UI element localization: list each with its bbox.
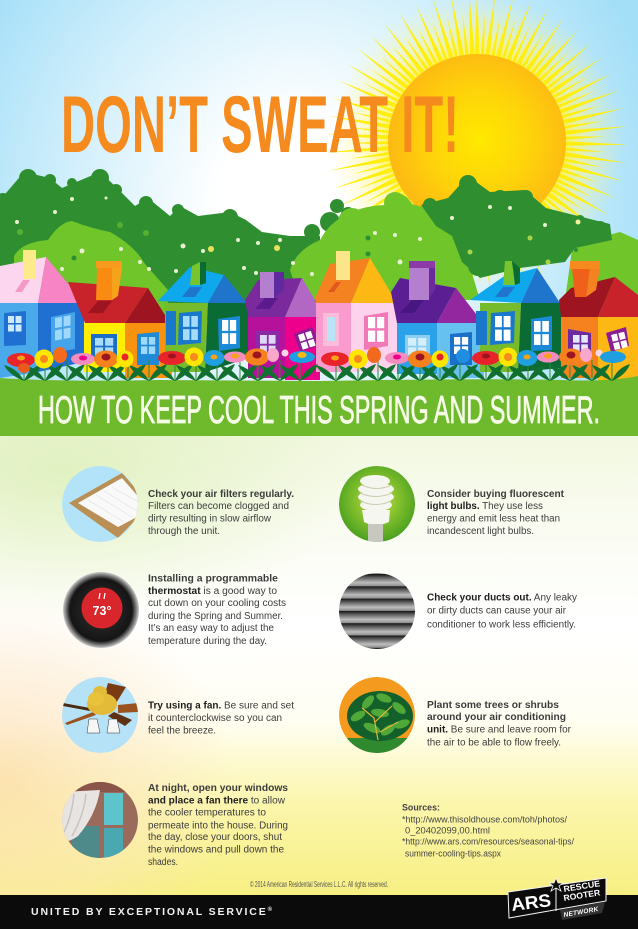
logo: ARS Rescue Rooter Network: RESCUE	[563, 878, 601, 894]
footer tagline: ®	[268, 906, 273, 913]
text: windows	[148, 783, 288, 868]
text: thermostat	[148, 574, 286, 647]
flowers row	[7, 347, 626, 373]
sources: 0_20402099,00.html	[405, 826, 490, 836]
text: air filters	[148, 489, 294, 537]
text: fan	[148, 700, 294, 736]
sources: *http://www.ars.com/resources/seasonal-tips/	[402, 836, 574, 846]
text: windows: permeate into the house. During	[148, 820, 288, 832]
icon: open window	[62, 782, 138, 860]
text: thermostat: temperature during the day.	[148, 636, 267, 647]
icon: air filter	[62, 466, 138, 542]
text: windows: At night, open your windows	[148, 783, 288, 794]
text: air filters: Check your air filters regularly.	[148, 489, 294, 500]
logo: ARS Rescue Rooter Network: ROOTER	[563, 887, 601, 903]
footer tagline: UNITED BY EXCEPTIONAL SERVICE	[31, 906, 266, 918]
text: thermostat: Installing a programmable	[148, 574, 278, 584]
text: air filters: Filters can become clogged and	[148, 501, 289, 512]
text: air filters: dirty resulting in slow airflow	[148, 514, 272, 524]
text: fan: it counterclockwise so you can	[148, 713, 282, 724]
text: windows: the cooler temperatures to	[148, 808, 266, 818]
house 8: red roof orange walls	[559, 261, 638, 382]
logo: ARS Rescue Rooter Network: NETWORK	[563, 906, 600, 919]
text: shrubs	[427, 700, 572, 748]
sun	[316, 0, 634, 301]
icon: thermostat	[63, 572, 139, 648]
icon: ceiling fan	[62, 677, 138, 753]
text: ducts: conditioner to work less efficiently.	[427, 620, 576, 630]
tree blossoms	[15, 196, 580, 282]
icon: duct vent	[339, 573, 415, 649]
house 5: orange roof pink walls	[316, 251, 398, 372]
text: windows: and place a fan there to allow	[148, 796, 286, 806]
trees: dark green left	[0, 169, 355, 320]
icon: fluorescent bulb	[339, 466, 415, 544]
text: ducts	[427, 592, 577, 630]
text: fan: Try using a fan. Be sure and set	[148, 700, 294, 712]
trees: dark green right	[421, 175, 612, 278]
sources: summer-cooling-tips.aspx	[405, 848, 501, 858]
text: thermostat: thermostat is a good way to	[148, 586, 277, 597]
logo: ARS Rescue Rooter Network	[508, 878, 606, 920]
sky background	[0, 0, 638, 400]
logo: ARS Rescue Rooter Network: ARS	[510, 890, 552, 915]
text: windows: shades.	[148, 857, 178, 868]
text: thermostat: during the Spring and Summer.	[148, 611, 283, 622]
text: ducts: Check your ducts out. Any leaky	[427, 592, 577, 604]
text: bulbs: light bulbs. They use less	[427, 501, 543, 512]
text: shrubs: Plant some trees or shrubs	[427, 700, 559, 711]
flower leaves	[4, 360, 630, 381]
trees: light green hills	[14, 192, 638, 320]
house 7: blue roof green walls	[470, 261, 561, 372]
sources: *http://www.thisoldhouse.com/toh/photos/	[402, 814, 567, 824]
house 6: purple roof blue walls	[391, 261, 484, 378]
lower background panel	[0, 436, 638, 896]
text: windows: the windows and pull down the	[148, 844, 284, 856]
text: windows: the day, close your doors, shut	[148, 832, 282, 843]
text: fan: feel the breeze.	[148, 726, 216, 736]
house 3: blue roof green walls	[158, 262, 249, 372]
text: bulbs: Consider buying fluorescent	[427, 489, 565, 500]
green ground band	[0, 376, 638, 436]
text: ducts: or dirty ducts can cause your air	[427, 606, 567, 616]
sources: Sources:	[402, 802, 440, 812]
house 2: red roof	[68, 261, 172, 378]
text: shrubs: unit. Be sure and leave room for	[427, 724, 572, 736]
footer bar	[0, 895, 638, 929]
text: thermostat: It’s an easy way to adjust the	[148, 623, 274, 634]
house 1: pink roof	[0, 250, 84, 378]
copyright: © 2014 American Residential Services L.L.C. All rights reserved.	[250, 879, 388, 889]
icon: shrub	[339, 677, 415, 756]
text: shrubs: the air to be able to flow freely.	[427, 738, 561, 748]
sources	[402, 802, 574, 858]
text: bulbs: energy and emit less heat than	[427, 514, 560, 524]
text: air filters: through the unit.	[148, 526, 220, 537]
text: shrubs: around your air conditioning	[427, 712, 566, 723]
text: bulbs: incandescent light bulbs.	[427, 526, 534, 537]
icon: thermostat: 73°	[93, 604, 111, 618]
text: thermostat: cut down on your cooling costs	[148, 598, 286, 609]
text: bulbs	[427, 489, 565, 537]
house 4: purple roof magenta walls	[245, 272, 325, 380]
